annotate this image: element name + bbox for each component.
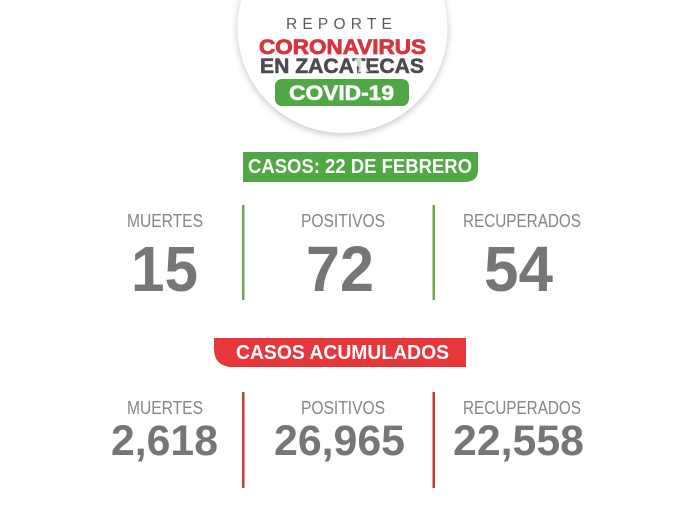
- red divider left: [242, 392, 244, 488]
- daily stat: positivos: [301, 211, 385, 305]
- daily stat: positivos: POSITIVOS: [301, 211, 385, 231]
- accumulated stat: recuperados: RECUPERADOS: [463, 398, 581, 418]
- accumulated stat: positivos: POSITIVOS: [301, 398, 385, 418]
- accumulated stat: muertes: MUERTES: [127, 398, 203, 418]
- logo: COVID-19 pill: [275, 79, 409, 106]
- green banner: daily cases: [243, 152, 478, 182]
- daily stat: recuperados: 54: [484, 233, 553, 305]
- green banner: daily cases: CASOS: 22 DE FEBRERO: [248, 156, 472, 178]
- daily stat: muertes: 15: [131, 233, 198, 305]
- daily stat: muertes: MUERTES: [127, 211, 203, 231]
- logo: COVID-19 pill: COVID-19: [289, 81, 394, 105]
- green divider left: [242, 205, 244, 300]
- accumulated stat: recuperados: 22,558: [453, 417, 584, 465]
- icon: Zacatecas skyline mark: [354, 57, 369, 73]
- red banner: accumulated cases: CASOS ACUMULADOS: [236, 342, 449, 364]
- accumulated stat: positivos: 26,965: [274, 417, 405, 465]
- logo badge: [238, 0, 448, 135]
- daily stat: positivos: 72: [306, 233, 374, 305]
- logo: CORONAVIRUS: CORONAVIRUS: [259, 35, 426, 59]
- red divider right: [432, 392, 435, 488]
- daily stat: recuperados: [463, 211, 581, 305]
- accumulated stat: muertes: 2,618: [111, 417, 218, 465]
- green divider right: [432, 205, 435, 300]
- logo: REPORTE: REPORTE: [286, 16, 397, 33]
- red banner: accumulated cases: [214, 338, 466, 367]
- logo: EN ZACATECAS: EN ZACATECAS: [260, 54, 424, 78]
- daily stat: recuperados: RECUPERADOS: [463, 211, 581, 231]
